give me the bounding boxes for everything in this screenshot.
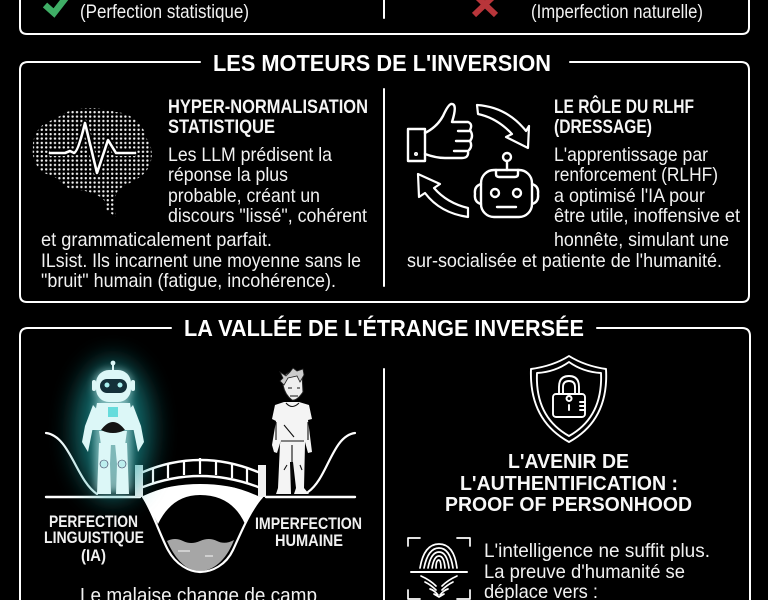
text: hyper-normalisation body: probable, créant un	[168, 185, 320, 207]
icon: green check	[45, 0, 68, 13]
icon: dotted brain with pulse	[33, 108, 152, 217]
text: hyper-normalisation body: Les LLM prédisent la	[168, 144, 332, 166]
icon: fingerprint scanner	[408, 538, 470, 599]
heading: rôle du RLHF: LE RÔLE DU RLHF	[554, 94, 694, 118]
panel: la vallée de l'étrange inversée	[20, 314, 750, 600]
icon: glowing robot	[75, 360, 151, 500]
heading: l'avenir de l'authentification: L'AVENIR DE	[508, 450, 629, 473]
heading: hyper-normalisation: STATISTIQUE	[168, 116, 275, 138]
icon: red cross	[474, 0, 496, 15]
icon: feedback arrow top	[477, 105, 529, 148]
text: imperfection: (Imperfection naturelle)	[531, 1, 703, 23]
text: RLHF body: a optimisé l'IA pour	[554, 185, 705, 207]
label: imperfection humaine: IMPERFECTION	[255, 514, 362, 533]
text: RLHF body: honnête, simulant une	[554, 229, 729, 251]
icon: bridge	[135, 458, 266, 524]
text: proof of personhood body: L'intelligence ne suffit plus.	[484, 540, 710, 562]
text: RLHF body: L'apprentissage par	[554, 144, 708, 166]
text: proof of personhood body	[484, 540, 710, 600]
label: perfection linguistique: LINGUISTIQUE	[44, 528, 144, 547]
text: hyper-normalisation body: ILsist. Ils incarnent une moyenne sans le	[41, 250, 361, 272]
heading: moteurs: LES MOTEURS DE L'INVERSION	[213, 50, 551, 76]
text: hyper-normalisation body: "bruit" humain (fatigue, incohérence).	[41, 270, 336, 292]
text: hyper-normalisation body: discours "lissé", cohérent	[168, 205, 368, 227]
heading: l'avenir de l'authentification: PROOF OF PERSONHOOD	[445, 493, 692, 516]
heading: l'avenir de l'authentification	[445, 450, 692, 516]
icon: shield with padlock	[531, 356, 606, 442]
label: perfection linguistique	[44, 512, 144, 565]
text: hyper-normalisation body	[41, 144, 368, 292]
text: RLHF body: être utile, inoffensive et	[554, 205, 741, 227]
panel: comparison (top)	[20, 0, 749, 34]
text: perfection: (Perfection statistique)	[80, 1, 249, 23]
heading: rôle du RLHF: (DRESSAGE)	[554, 116, 652, 138]
panel: les moteurs de l'inversion	[20, 50, 749, 302]
text: proof of personhood body: La preuve d'humanité se	[484, 561, 685, 583]
heading: vallée: LA VALLÉE DE L'ÉTRANGE INVERSÉE	[184, 314, 584, 341]
text: hyper-normalisation body: et grammaticalement parfait.	[41, 229, 272, 251]
label: perfection linguistique: (IA)	[81, 546, 106, 565]
heading: hyper-normalisation: HYPER-NORMALISATION	[168, 96, 368, 118]
label: imperfection humaine	[255, 514, 362, 550]
text: RLHF body: sur-socialisée et patiente de l'humanité.	[407, 250, 722, 272]
text: hyper-normalisation body: réponse la plus	[168, 164, 288, 186]
chart: valley ground and curves	[46, 433, 355, 572]
icon: feedback arrow bottom	[418, 174, 468, 217]
text: RLHF body	[407, 144, 741, 272]
icon: thumbs up	[408, 104, 472, 161]
icon: robot head	[475, 153, 538, 217]
icon: human figure	[272, 368, 312, 494]
label: perfection linguistique: PERFECTION	[49, 512, 138, 531]
text: RLHF body: renforcement (RLHF)	[554, 164, 718, 186]
water	[167, 539, 234, 571]
heading: hyper-normalisation	[168, 96, 368, 138]
heading: l'avenir de l'authentification: L'AUTHENTIFICATION :	[460, 472, 678, 495]
heading: rôle du RLHF	[554, 94, 694, 138]
label: imperfection humaine: HUMAINE	[275, 531, 343, 550]
